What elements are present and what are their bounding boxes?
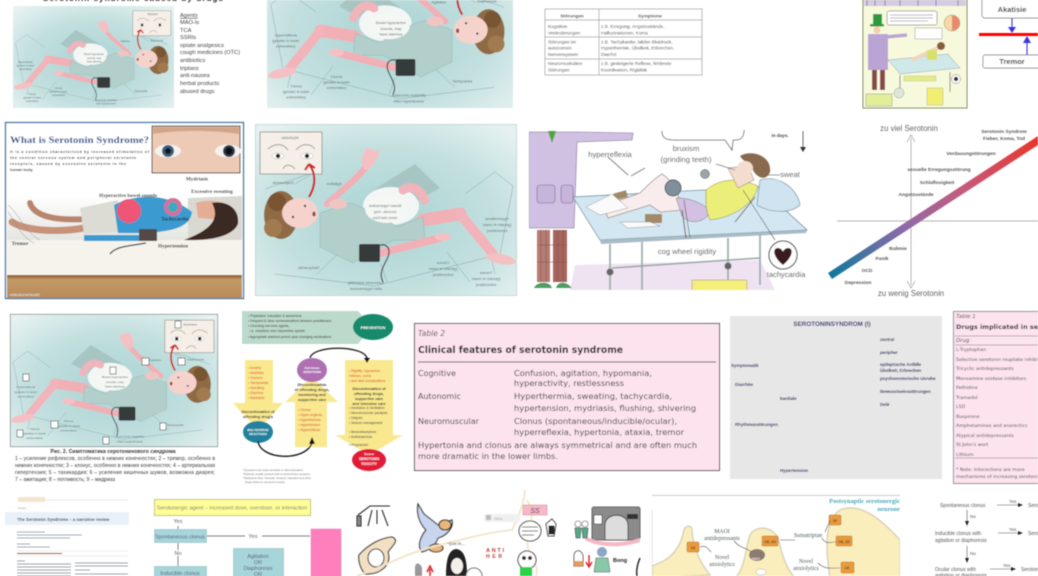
reflex hammer and pointer lines [608,157,780,240]
table 1: drugs implicated in severe serotonin syndrome: * Note: Interactions are more [956,467,1025,473]
labels: anxiolytics [709,562,735,568]
footnotes: *Methylene blue, linezolid, fentanyl, tramadol and other [243,476,311,480]
banner: prevention: i.e. morphine over meperidine opioids [250,329,305,333]
arrow: moderate reactions: supportive care [298,398,326,402]
arrow: severe toxicity: SEROTONIN [359,457,380,461]
labels: Novel [715,555,729,561]
arrow: moderate reactions: Full blown [305,366,320,370]
slide: Serotoninsyndrom: Diarrhöe [735,382,754,387]
footnotes: *Patients usually present with a predominant symptom. [243,472,311,476]
arrow: severe toxicity: and intensive care [352,402,386,406]
diagram: postsynaptic serotonergic neurone: 1A [845,566,850,570]
footnotes: *Symptoms are least sensitive to discontinuation. [243,468,304,472]
table: Störungen and Symptome: Kognitive [548,24,568,29]
labels [704,529,822,572]
diagram: postsynaptic serotonergic neurone [652,495,900,576]
slide: Serotoninsyndrom: psychomotorische Unruhe [880,376,936,381]
arrow: severe toxicity: supportive care [355,397,383,401]
doodle: pill and up arrow [415,564,433,576]
arrow: moderate reactions: • Hyper-reglexia [298,413,322,417]
arrow: mild reactions [233,360,283,443]
panel: mirrored patient illustration [255,124,517,296]
diagram: Akatisie and Tremor: Tremor [999,57,1025,66]
table 1: drugs implicated in severe serotonin syndrome: Tricyclic antidepressants [955,366,1014,372]
text: agents list: herbal products [180,81,219,87]
hand note: ANTI [486,548,504,554]
arrow: moderate reactions: of offending drugs, [295,388,329,392]
table 1: drugs implicated in severe serotonin syndrome: Lithium [956,452,974,458]
watermark: eMedicineHealth [10,292,40,297]
text: agents list: SSRIs [180,35,196,41]
curved arrows [258,348,367,456]
floor shadow [570,260,775,290]
article page: The Serotonin Syndrome narrative review: Review [18,507,26,510]
chart: serotonin level diagonal: Panik [875,256,889,262]
labels: symptoms: Mydriasis [186,176,208,182]
doodle: camera [585,507,640,546]
arrow: mild reactions: • Mydriasis [248,396,265,400]
arrow: mild reactions: • Tachycardia [248,381,268,385]
panel: cartoon patient with hyperreflexia, bruxism, sweat, rigidity and tachycardia [529,130,807,292]
labels: tachycardia [767,270,806,279]
caption: гипертензия; 5 – тахикардия; 6 – усиление кишечных шумов, возможна диарея; [15,470,215,476]
text: agents list: opiate analgesics [180,43,224,49]
text: agents list [180,13,240,95]
table 1: drugs implicated in severe serotonin syndrome: LSD [956,404,966,410]
flowchart: serotonergic agent decision tree: No [174,551,182,557]
doodle: pill, down arrow and figure [574,547,640,576]
caption: Рис. 2. Симптоматика серотонинового синдрома [50,449,176,455]
text: agents list: TCA [180,28,192,34]
labels: MAOI [714,529,730,535]
illustration: patient with labelled symptoms [13,6,174,108]
table 2: clinical features of serotonin syndrome [414,324,720,470]
arrow: severe toxicity: • Rigidity, hypoactive [349,369,380,373]
flowchart: clonus decision sequence: agitation or diaphoresis [935,538,987,544]
banner: prevention: • Appropriate washout period upon changing medications [248,335,332,339]
footnotes: drugs linked to serotonin toxicity. [245,480,286,484]
text block: definition: It is a condition characterized by increased stimulation of [10,150,150,154]
text block: definition: human body. [10,168,33,172]
flowchart: serotonergic agent decision tree: Agitation [247,554,269,560]
table: Störungen and Symptome: Symptome [638,14,662,18]
arrow: severe toxicity: • Benzodiazepines [349,430,377,434]
table: Störungen and Symptome: Diarrhö [601,52,617,57]
chart: serotonin level diagonal: sexuelle Erregungsstörung [907,167,971,173]
flowchart: serotonergic agent decision tree: Yes [249,534,258,540]
doodle: pill, down arrow and figure: Bong [613,558,627,564]
path: winding border [357,490,537,576]
labels [588,144,806,279]
diagram: postsynaptic serotonergic neurone: 1A [691,546,696,550]
arrow: moderate reactions: Discontinuation [298,383,327,387]
slide: Serotoninsyndrom: Übelkeit, Erbrechen [880,368,922,373]
table 1: drugs implicated in severe serotonin syndrome [954,312,1038,484]
table: Störungen and Symptome: Hyperthermie, Übelkeit, Erbrechen, [601,44,674,50]
doctor [529,131,633,288]
toolbar fragment [484,514,520,522]
diagram: Akatisie and Tremor: Akatisie [998,5,1026,14]
panel: annotated patient figure with Russian caption [10,314,218,483]
chart: serotonin level diagonal: Verdauungstörungen [946,151,996,157]
caption: 1 – усиление рефлексов, особенно в нижних конечностях; 2 – тремор, особенно в [15,456,215,462]
slide: Serotoninsyndrom: Bewusstseinsstörungen [880,389,931,394]
illustration [10,314,218,447]
table 1: drugs implicated in severe serotonin syndrome: Amphetamines and anorectics [956,423,1028,429]
labels: cog wheel rigidity [658,247,716,256]
table 2: clinical features of serotonin syndrome: Hypertonia and clonus are always symmetrical and are often much [418,441,697,450]
photo: dilated eyes [152,126,241,173]
table 1: drugs implicated in severe serotonin syndrome: St John's wort [956,442,988,448]
table: Störungen and Symptome [545,9,702,75]
table: Störungen and Symptome: z.B. Erregung, Angstzustände, [601,24,664,29]
arrow: severe toxicity: Discontinuation of [352,387,386,391]
table 2: clinical features of serotonin syndrome: hyperreflexia, hypertonia, ataxia, tremor [514,428,685,437]
diagram: postsynaptic serotonergic neurone: 1F [833,519,838,523]
MAO enzyme [749,549,766,575]
table 1: drugs implicated in severe serotonin syndrome: Drug [956,338,970,344]
chart: serotonin level diagonal: OCD [862,268,873,274]
arrow: mild reactions: REACTIONS [249,432,267,436]
chart: serotonin level diagonal: Angstzustände [898,192,934,198]
arrow: moderate reactions: • Clonus [298,408,311,412]
caption [15,449,215,483]
arrow: mild reactions: • Akathisia [248,371,264,375]
table: Störungen and Symptome: Störungen im [548,40,576,44]
labels: symptoms: Excessive sweating [191,189,233,195]
flowchart: clonus decision sequence: Spontaneous clonus [940,503,986,509]
labels: symptoms: Hyperactive bowel sounds [99,193,157,199]
slide: Serotoninsyndrom: Hypertension [780,468,808,473]
arrow: mild reactions: • Anxiety [248,366,261,370]
slide: Serotoninsyndrom: epileptische Anfälle [880,362,922,367]
arrow: moderate reactions: • Hypertension [298,423,320,427]
table 1: drugs implicated in severe serotonin syndrome: Table 1 [956,314,976,320]
labels: bruxism [673,144,699,153]
banner: prevention: • Frequent & clear communications between practitioners [248,319,332,323]
flowchart: serotonergic agent decision tree: Yes [174,519,183,525]
chart: serotonin level diagonal: zu wenig Serotonin [878,289,944,298]
arrow: severe toxicity: • Antihistamines [349,435,373,439]
table: Störungen and Symptome: Neuromuskuläre [548,61,583,66]
arrow: severe toxicity: offending drugs, [354,392,384,396]
table 2: clinical features of serotonin syndrome: Clonus (spontaneous/inducible/ocular), [514,417,677,426]
flowchart: clonus decision sequence: Yes [1009,527,1017,532]
table 2: clinical features of serotonin syndrome: hyperactivity, restlessness [514,379,624,388]
flowchart: serotonergic agent decision tree: Diaphoresis [243,566,273,572]
text: agents list: antibiotics [180,58,205,64]
table 1: drugs implicated in severe serotonin syndrome: Tramadol [955,395,978,401]
scene: patient on a mattress [7,195,242,298]
table 2: clinical features of serotonin syndrome: Hyperthermia, sweating, tachycardia, [514,392,672,401]
arrow: moderate reactions: • Hyperreflexia [298,428,320,432]
flowchart: clonus decision sequence: No [970,551,976,556]
labels: anxiolytics [793,566,819,572]
arrow: severe toxicity: • Propranolol [349,443,368,447]
labels: sweat [780,170,801,179]
arrow: severe toxicity: Severe [364,452,374,456]
toolbar fragment: Slick [494,516,502,521]
flowchart: clonus decision sequence: Inducible clonus with [935,531,981,537]
arrow: mild reactions: • Tremors [248,376,263,380]
banner: prevention: PREVENTION [361,326,386,330]
text: agents list: cough medicines (OTC) [180,50,240,56]
arrow heads [309,358,370,444]
table 2: clinical features of serotonin syndrome: Clinical features of serotonin syndrome [418,345,623,356]
table: Störungen and Symptome: Veränderungen [548,30,580,36]
patient [586,153,770,238]
slide: Serotoninsyndrom: Delir [880,402,890,407]
flowchart: clonus decision sequence: No [970,514,976,519]
receptors [687,515,854,573]
text block: definition: the central nervous system and peripheral serotonin [10,156,137,160]
slide: Serotoninsyndrom: peripher [879,350,898,355]
flowchart: clonus decision sequence [935,499,1038,576]
flowchart: clonus decision sequence: Ocular clonus with [935,567,976,573]
text: agents list: Agents [180,13,198,19]
slide: Serotoninsyndrom: zentral [879,337,895,342]
arrow: moderate reactions [285,358,338,447]
arrow: mild reactions: • Sweating [248,386,264,390]
heading: Postsynaptic serotonergic [829,498,900,505]
table 1: drugs implicated in severe serotonin syndrome: Buspirone [956,414,980,420]
table 2: clinical features of serotonin syndrome: Table 2 [418,329,445,338]
arrow: severe toxicity: • and fatal complications [349,379,386,383]
footnotes [243,468,311,484]
table: Störungen and Symptome: z.B. gesteigerte Reflexe, fehlende [601,61,672,66]
text block: definition: receptors, caused by excessive serotonin in the [10,162,126,166]
table 1: drugs implicated in severe serotonin syndrome: Atypical antidepressants [956,433,1014,439]
labels: symptoms: Tachycardia [161,216,189,222]
labels: Sumatriptan [794,533,822,539]
bed [573,179,807,292]
arrow: severe toxicity: reflexes, coma [349,374,371,378]
table 1: drugs implicated in severe serotonin syndrome: Monoamine oxidase inhibitors [956,376,1027,382]
icon: heart in a circle [769,241,797,269]
labels: antidepressants [704,536,740,542]
heading: neurone [877,506,900,513]
labels: hyperreflexia [588,150,633,159]
table: Störungen and Symptome: autonomen [548,46,572,50]
arrow: mild reactions: Mild ADVERSE [247,428,269,432]
table 2: clinical features of serotonin syndrome: Confusion, agitation, hypomania, [514,369,652,378]
doodle: pink sign: SS [530,508,540,515]
doodles: left group [357,504,452,574]
arrow: severe toxicity: TOXICITY [361,462,378,466]
text block: definition [10,150,150,172]
caption: нижних конечностях; 3 – клонус, особенно в нижних конечностях; 4 – артериальная [15,463,215,469]
MAO enzyme: MAO [752,557,760,561]
slide: Serotoninsyndrom [730,316,942,479]
doodle: speech bubble [519,519,556,541]
arrow: severe toxicity: • Neuromuscular paralysis [349,411,388,415]
arrow: severe toxicity: • Seizure management [349,421,382,425]
arrow: severe toxicity: • Dialysis [349,416,363,420]
diagram: postsynaptic serotonergic neurone: 1B, 1D [838,540,850,544]
banner: prevention: • Choosing low-toxic agents, [248,324,290,328]
labels: symptoms: Hypertension [158,244,188,250]
arrow: mild reactions: Discontinuation of [241,410,275,414]
text: agents list: abused drugs [180,89,215,95]
table: Störungen and Symptome: Koordination, Rigidität [601,68,648,72]
doodle: dark haired figure [446,549,482,576]
arrow: severe toxicity: • Intubation & ventilation [349,406,385,410]
table: Störungen and Symptome: Störungen [560,14,584,18]
flowchart: serotonergic agent decision tree: Spontaneous clonus [155,534,205,540]
arrow: moderate reactions: monitoring and [298,393,326,397]
doodle: two figures [575,521,588,538]
table 1: drugs implicated in severe serotonin syndrome: Pethidine [956,385,978,391]
table 2: clinical features of serotonin syndrome: hypertension, mydriasis, flushing, shivering [514,404,696,413]
table: Störungen and Symptome: Störungen [548,68,570,72]
slide: Serotoninsyndrom: kardiale [780,396,797,401]
slide: Serotoninsyndrom: SEROTONINSYNDROM (I) [793,321,871,328]
note and arrow: in days: in days. [771,133,789,138]
panel: patient illustration, cropped [267,0,513,108]
chart: serotonin level diagonal: Depression [845,280,871,286]
flowchart: serotonergic agent decision tree: Serotonergic agent – increased dose, overdose, or interaction [157,506,307,512]
table 2: clinical features of serotonin syndrome: Neuromuscular [418,417,480,426]
flowchart: serotonergic agent decision tree: OR [254,560,262,566]
table 2: clinical features of serotonin syndrome: Cognitive [418,369,456,378]
table: Störungen and Symptome: z.B. Tachykardie, labiler Blutdruck, [601,40,673,44]
labels: (grinding teeth) [660,155,712,164]
text: agents list: anti-nausea [180,73,211,79]
flowchart: serotonin toxicity prevention and treatment [233,311,403,484]
heading [829,498,900,513]
slide: Serotoninsyndrom: Rhythmusstörungen [735,422,778,427]
arrow: moderate reactions: • Hyperthermia [298,418,321,422]
arrow: mild reactions: • Diarrhea [248,391,263,395]
table 2: clinical features of serotonin syndrome: more dramatic in the lower limbs. [418,452,558,461]
article page: The Serotonin Syndrome narrative review [5,497,129,576]
labels: symptoms: Tremor [12,241,29,247]
hand-drawn sketch notes [357,490,640,576]
banner: prevention [242,311,393,344]
doodle: pink sign [523,505,547,515]
table 1: drugs implicated in severe serotonin syndrome: L-Tryptophan [956,347,986,353]
chart: serotonin level diagonal: Fieber, Koma, Tod [983,136,1025,142]
arrow: mild reactions: offending drug/s [243,415,273,419]
chart: serotonin level diagonal: Serotonin Syndrom [981,129,1027,135]
panel: What is Serotonin Syndrome [6,122,244,298]
doodle: face with green shirt [518,551,536,576]
chart: serotonin level diagonal: zu viel Serotonin [880,124,938,133]
arrow: severe toxicity [335,360,403,471]
labels: Novel [799,559,813,565]
panel: patient illustration with agents list [13,6,240,108]
caption: 7 – ажитация; 8 – потливость; 9 – мидриаз [15,477,116,483]
table 2: clinical features of serotonin syndrome: Autonomic [418,392,461,401]
diagram: Akatisie and Tremor [979,0,1038,68]
table: Störungen and Symptome: Nervensystem [548,52,578,57]
chart: serotonin level diagonal: Schlaflosigkeit [920,180,955,186]
arrows [700,520,840,568]
panel: cartoon poster with doctor and patient [863,0,967,108]
slide: Serotoninsyndrom: Symptomatik [731,363,759,368]
hand-drawn sketch notes: ~just in... [447,541,465,546]
diagram: postsynaptic serotonergic neurone: 1B, 1D [764,540,776,544]
speech bubble [662,130,744,150]
heading: What is Serotonin Syndrome? [10,135,149,146]
hand-drawn sketch notes: HER [486,554,502,560]
flowchart: clonus decision sequence: Yes [1003,563,1011,568]
flowchart: serotonergic agent decision tree [154,500,341,576]
chart: serotonin level diagonal [828,124,1038,298]
neurones [652,508,900,576]
numbered callouts [17,321,185,444]
note and arrow: in days [771,131,806,152]
banner: prevention: • Physicians' education & awareness [248,314,302,318]
chart: serotonin level diagonal: Bulimie [889,246,907,252]
text: agents list: MAO-Is [180,20,199,26]
flowchart: clonus decision sequence: Yes [1009,499,1017,504]
arrow: moderate reactions: SEROTONIN [303,370,321,374]
article page: The Serotonin Syndrome narrative review: The Serotonin Syndrome – a narrative review [17,517,110,522]
labels: symptoms [12,176,233,250]
table: Störungen and Symptome: Halluzinationen, Koma [601,30,648,36]
text: agents list: triptans [180,66,199,72]
